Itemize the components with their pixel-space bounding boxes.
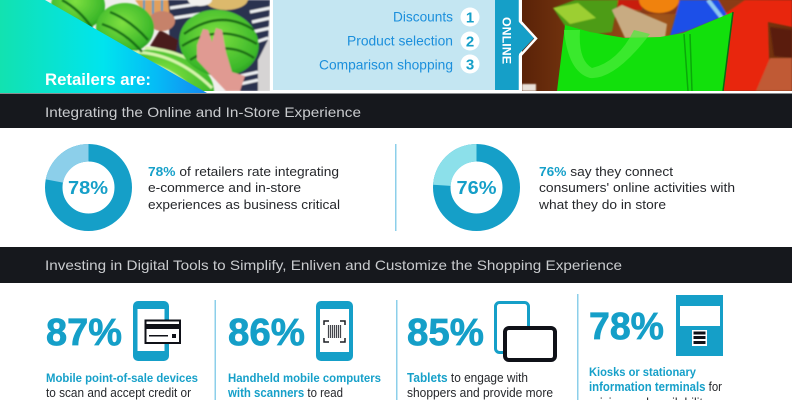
column: 86% handheld mobile computers: with scanners to read: [227, 385, 343, 400]
column: 85% tablets: 85%: [407, 312, 484, 354]
banner: integrating heading: [0, 94, 792, 128]
stat: 78% donut chart: 78%: [68, 177, 108, 198]
panel: online reasons: [273, 0, 495, 90]
column: 78% kiosks: information terminals for: [589, 379, 723, 394]
icon: phone with barcode scanner: [316, 301, 353, 361]
gradient corner triangle: [0, 0, 207, 93]
stat: 78% donut chart: [46, 144, 123, 222]
column: 85% tablets: [407, 302, 555, 400]
list item: comparison shopping: Comparison shopping: [319, 56, 453, 72]
list item: product selection: Product selection: [347, 32, 453, 48]
column: 87% mobile point-of-sale: [46, 301, 198, 400]
icon: kiosk terminal: [676, 295, 723, 356]
column: 86% handheld mobile computers: 86%: [228, 312, 305, 354]
text: 78% of retailers: experiences as business critical: [148, 197, 340, 212]
column: 85% tablets: shoppers and provide more: [407, 385, 553, 400]
list item: discounts: 1: [466, 10, 474, 26]
heading: Retailers are: Retailers are:: [45, 71, 151, 89]
column: 85% tablets: Tablets to engage with: [407, 370, 528, 385]
stat: 76% donut chart: [433, 144, 511, 222]
icon: tablet pair: [496, 302, 555, 360]
list item: discounts: Discounts: [393, 8, 453, 24]
text: 78% of retailers: 78% of retailers rate integrating: [148, 164, 339, 179]
column: 87% mobile point-of-sale: Mobile point-of-sale devices: [46, 373, 198, 385]
banner: investing heading: Investing in Digital Tools to Simplify, Enliven and Customize the Shopping Experience: [45, 257, 622, 273]
column: 86% handheld mobile computers: Handheld mobile computers: [228, 373, 381, 385]
text: 76% say they connect: [538, 164, 735, 212]
column: 86% handheld mobile computers: [227, 301, 381, 400]
icon: phone with credit card: [133, 301, 181, 361]
text: 78% of retailers: [148, 164, 340, 212]
text: 76% say they connect: 76% say they connect: [539, 164, 673, 179]
column: 87% mobile point-of-sale: to scan and accept credit or: [46, 385, 192, 400]
banner: integrating heading: Integrating the Online and In-Store Experience: [45, 104, 361, 120]
tab: online: [495, 0, 536, 91]
tab: online: ONLINE: [500, 17, 514, 64]
list item: product selection: [347, 32, 480, 50]
column: 78% kiosks: [589, 295, 723, 400]
list item: product selection: 2: [466, 34, 474, 50]
text: 76% say they connect: what they do in store: [538, 197, 666, 212]
column: 87% mobile point-of-sale: 87%: [46, 312, 122, 354]
photo: green shopping bag with groceries: [522, 0, 792, 91]
stat: 76% donut chart: 76%: [456, 177, 496, 198]
text: 76% say they connect: consumers' online activities with: [539, 180, 735, 195]
column: 78% kiosks: Kiosks or stationary: [589, 367, 697, 379]
banner: investing heading: [0, 247, 792, 283]
list item: comparison shopping: 3: [466, 56, 474, 74]
text: 78% of retailers: e-commerce and in-store: [148, 180, 301, 195]
list item: discounts: [393, 8, 480, 26]
column: 78% kiosks: 78%: [589, 306, 664, 348]
photo: shoppers holding watermelons: [46, 0, 270, 91]
